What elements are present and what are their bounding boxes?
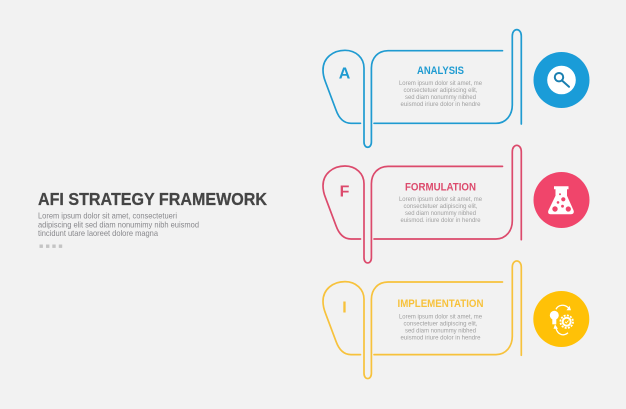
body text: euismod iriure dolor in hendre [400,334,481,341]
body text: consectetuer adipiscing elit, [404,87,478,94]
body text: Lorem ipsum dolor sit amet, me [399,196,483,203]
body text: sed diam nonummy nibhed [405,327,477,334]
left text block [38,189,267,248]
panel: analysis [323,30,590,147]
heading: implementation: IMPLEMENTATION [398,298,484,310]
body text: euismod iriure dolor in hendre [400,101,481,108]
heading: analysis: ANALYSIS [417,65,464,77]
body text: sed diam nonummy nibhed [405,94,477,101]
letter F: F [340,184,350,201]
description: Lorem ipsum dolor sit amet, consectetueri [38,212,177,220]
pagination dots [40,244,62,248]
body text: sed diam nonummy nibhed [405,210,477,217]
outline: implementation [323,261,521,379]
description: tincidunt utare laoreet dolore magna [38,229,158,238]
description: adipiscing elit sed diam nonumimy nibh euismod [38,220,199,229]
icon: idea gear cycle circle [533,291,589,347]
icon: magnifier circle [534,52,590,108]
body text: consectetuer adipiscing elit, [404,203,478,210]
title: AFI STRATEGY FRAMEWORK [38,189,267,209]
body text [399,80,483,108]
outline: formulation [323,145,521,263]
panel: implementation [323,261,589,379]
description [38,212,199,238]
letter I: I [342,299,347,316]
body text: Lorem ipsum dolor sit amet, me [399,313,483,320]
letter A: A [339,65,351,82]
outline: analysis [323,30,521,147]
panel: formulation [323,145,590,263]
body text: consectetuer adipiscing elit, [404,320,478,327]
body text: euismod. iriure dolor in hendre [400,217,481,224]
body text [399,196,483,224]
body text: Lorem ipsum dolor sit amet, me [399,80,483,87]
body text [399,313,483,341]
icon: flask circle [534,172,590,228]
heading: formulation: FORMULATION [405,181,476,193]
